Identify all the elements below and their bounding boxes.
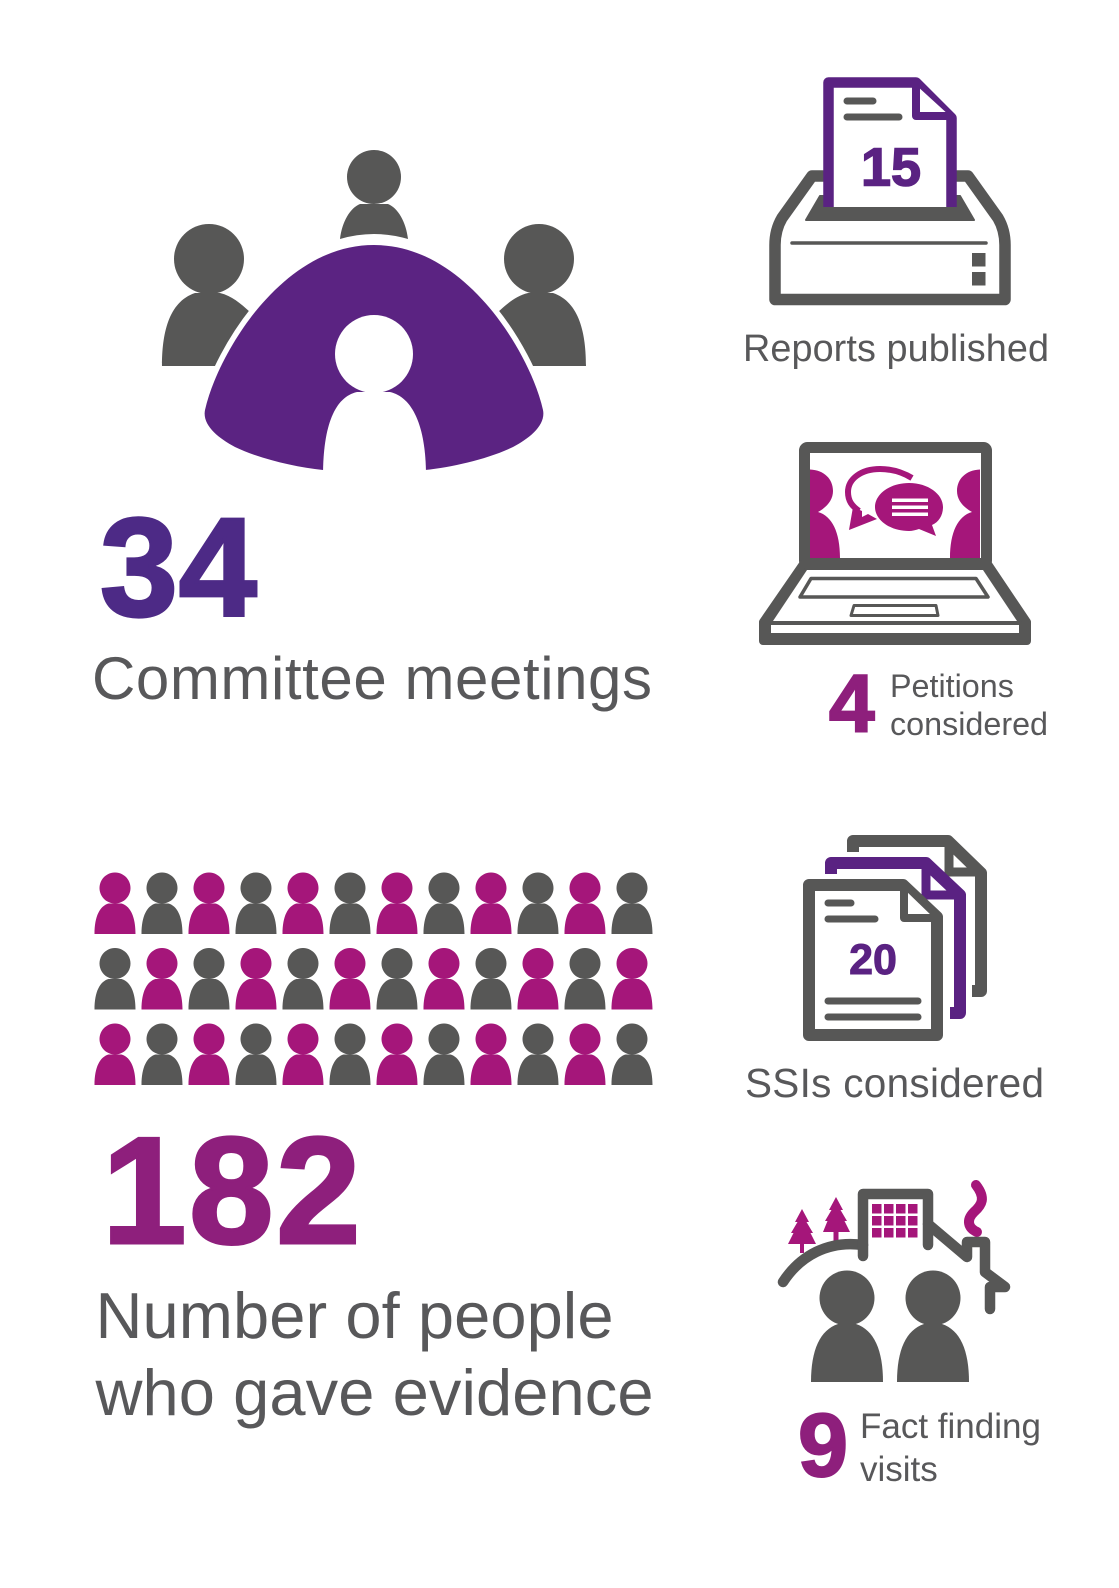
icon: top person [340,150,408,239]
panel: fact finding visits [783,1185,1041,1496]
trackpad [851,606,938,616]
number: 4: 4 [829,658,875,750]
on-screen right person [950,470,980,558]
icon: building and hill outline [783,1194,1005,1309]
chart: grid of people icons [94,872,652,1085]
speech bubble filled [875,483,943,536]
label: Number of people who gave evidence: who gave evidence [94,1356,654,1429]
panel: reports published [743,82,1049,370]
icon: right visitor [897,1270,969,1382]
front document [809,885,937,1035]
icon: laptop [763,448,1027,641]
icon: left person [162,224,260,366]
label: Fact finding visits [860,1407,1041,1489]
laptop base [763,564,1027,641]
panel: committee meetings [92,150,652,712]
laptop deck [773,570,1017,621]
document fold [916,85,950,116]
label: Reports published: Reports published [743,328,1049,370]
printer buttons [972,253,986,286]
printer body [775,176,1005,300]
label: Petitions considered [890,668,1048,742]
icon: stack of documents [809,841,981,1035]
document text lines [847,101,899,117]
icon: printer with document [775,82,1005,300]
speech bubble lines [892,498,928,516]
icon: left visitor [811,1270,883,1382]
middle document [831,863,960,1013]
number: 20: 20 [849,936,897,984]
label: Petitions considered: considered [890,706,1048,742]
number: 15: 15 [861,138,921,198]
printer tray [806,196,974,220]
icon: tall tree [823,1197,850,1243]
icon: purple table [205,245,543,470]
panel: SSIs considered [745,841,1044,1106]
icon: visit scene [783,1185,1005,1382]
label: Fact finding visits: visits [860,1450,938,1489]
panel: petitions considered [763,448,1048,750]
icon: window grid [872,1204,918,1238]
keyboard [800,578,988,597]
label: Committee meetings: Committee meetings [92,645,652,712]
number: 182: 182 [102,1106,363,1276]
speech bubble outline [848,469,912,511]
icon: white person at table [323,315,426,476]
label: Number of people who gave evidence: Number of people [96,1279,614,1352]
label: Petitions considered: Petitions [890,668,1014,704]
row 2 of people [94,948,652,1010]
on-screen left person [810,470,840,558]
number: 34: 34 [100,488,258,646]
icon: people around a meeting table [162,150,586,476]
icon: small tree [788,1209,816,1253]
front document lines [828,903,918,1017]
back document [853,841,981,991]
icon: smoke [969,1185,982,1232]
label: Fact finding visits: Fact finding [860,1407,1041,1446]
speech bubble tail [849,507,877,530]
laptop front edge [771,625,1019,633]
document [828,82,952,207]
front document fold [904,889,934,918]
panel: people who gave evidence [94,872,654,1429]
row 3 of people [94,1024,652,1085]
label: SSIs considered: SSIs considered [745,1060,1044,1106]
number: 9: 9 [798,1396,848,1496]
row 1 of people [94,872,652,934]
icon: right person [488,224,586,366]
label: Number of people who gave evidence [94,1279,654,1429]
laptop screen [804,448,986,564]
printer slit line [792,241,986,245]
